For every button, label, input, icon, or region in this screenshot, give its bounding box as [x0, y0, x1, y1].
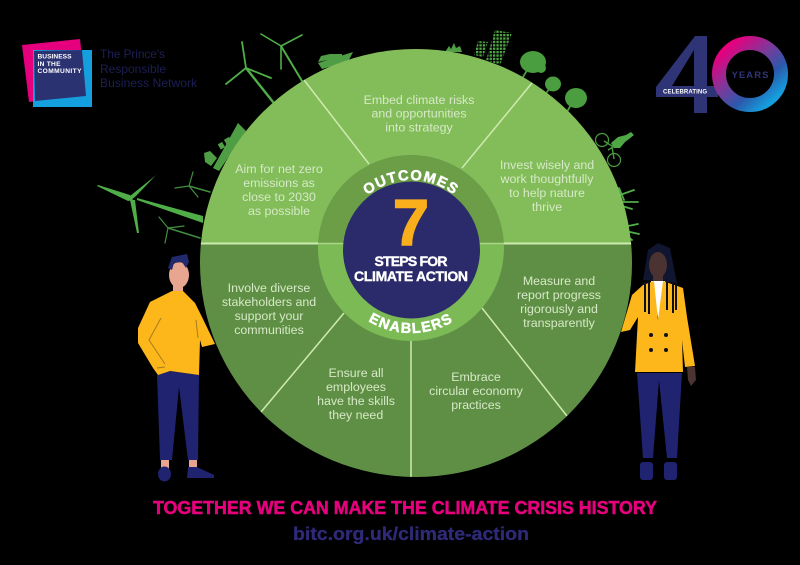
- icon: container ship: [204, 123, 246, 171]
- logo tagline: [100, 47, 198, 90]
- celebrating 40 years logo: [656, 36, 781, 113]
- icon: cyclist: [596, 132, 634, 166]
- text: net zero: as possible: [248, 204, 310, 218]
- figure: woman in yellow jacket: [621, 243, 696, 480]
- text: circular economy: practices: [451, 398, 501, 412]
- label: enablers: ENABLERS: [368, 312, 452, 334]
- heading: steps for climate action: STEPS FOR: [374, 253, 448, 269]
- text: involve stakeholders: support your: [235, 309, 303, 323]
- text: ensure employees: employees: [326, 380, 386, 394]
- text: ensure employees: have the skills: [317, 394, 395, 408]
- text: embed climate risks: into strategy: [385, 120, 454, 134]
- text: invest wisely: work thoughtfully: [500, 172, 594, 186]
- text: embed climate risks: Embed climate risks: [364, 93, 474, 107]
- icon: buildings: [445, 30, 512, 65]
- sector dividers: [196, 80, 636, 480]
- text: invest wisely: to help nature: [509, 186, 585, 200]
- text: measure and report: Measure and: [523, 274, 595, 288]
- hub centre: [343, 182, 480, 318]
- icon: boat: [318, 52, 353, 69]
- celebrating 40 years logo: YEARS: [732, 70, 768, 81]
- text: involve stakeholders: Involve diverse: [228, 281, 310, 295]
- logo tagline: Responsible: [100, 62, 166, 76]
- logo tagline: The Prince's: [100, 47, 165, 61]
- hub divider: [318, 242, 504, 244]
- logo tagline: Business Network: [100, 76, 198, 90]
- icon: wind turbine 3 large: [97, 173, 203, 233]
- BITC logo: COMMUNITY: [38, 68, 82, 75]
- text: measure and report: transparently: [523, 316, 596, 330]
- BITC logo: IN THE: [38, 61, 61, 68]
- text: embed climate risks: and opportunities: [371, 106, 467, 120]
- BITC logo: [22, 39, 92, 107]
- celebrating 40 years logo: CELEBRATING: [663, 90, 707, 96]
- figure: man in yellow jumper: [138, 254, 215, 482]
- heading: steps for climate action: CLIMATE ACTION: [354, 268, 468, 284]
- heading: steps for climate action: [354, 253, 468, 284]
- panel: enablers half: [200, 244, 632, 477]
- text: invest wisely: Invest wisely and: [500, 158, 594, 172]
- icon: wind turbine 1: [226, 42, 273, 102]
- BITC logo: BUSINESS: [38, 54, 72, 60]
- text: measure and report: rigorously and: [520, 302, 598, 316]
- hub lower ring: [318, 244, 504, 341]
- text: involve stakeholders: communities: [234, 323, 304, 337]
- icon: wind turbine 5: [159, 217, 200, 243]
- icon: wind turbine 4: [175, 172, 210, 197]
- text: invest wisely: thrive: [532, 200, 562, 214]
- text: net zero: Aim for net zero: [235, 162, 323, 176]
- hub upper ring: [318, 155, 504, 243]
- text: circular economy: circular economy: [429, 384, 524, 398]
- headline: TOGETHER WE CAN MAKE THE CLIMATE CRISIS HISTORY: [153, 497, 658, 518]
- text: net zero: emissions as: [243, 176, 315, 190]
- text: circular economy: Embrace: [451, 370, 501, 384]
- icon: wind turbine 2: [261, 34, 302, 81]
- text: net zero: close to 2030: [242, 190, 316, 204]
- label: outcomes: OUTCOMES: [364, 170, 458, 194]
- text: measure and report: report progress: [517, 288, 601, 302]
- text: involve stakeholders: stakeholders and: [222, 295, 316, 309]
- number seven: 7: [393, 186, 429, 259]
- panel: outcomes half: [200, 49, 632, 244]
- text: ensure employees: Ensure all: [328, 366, 384, 380]
- circular diagram: [200, 49, 632, 477]
- icon: trees: [520, 51, 587, 110]
- website link: bitc.org.uk/climate-action: [293, 523, 529, 544]
- icon: plants: [619, 188, 639, 240]
- text: ensure employees: they need: [329, 408, 383, 422]
